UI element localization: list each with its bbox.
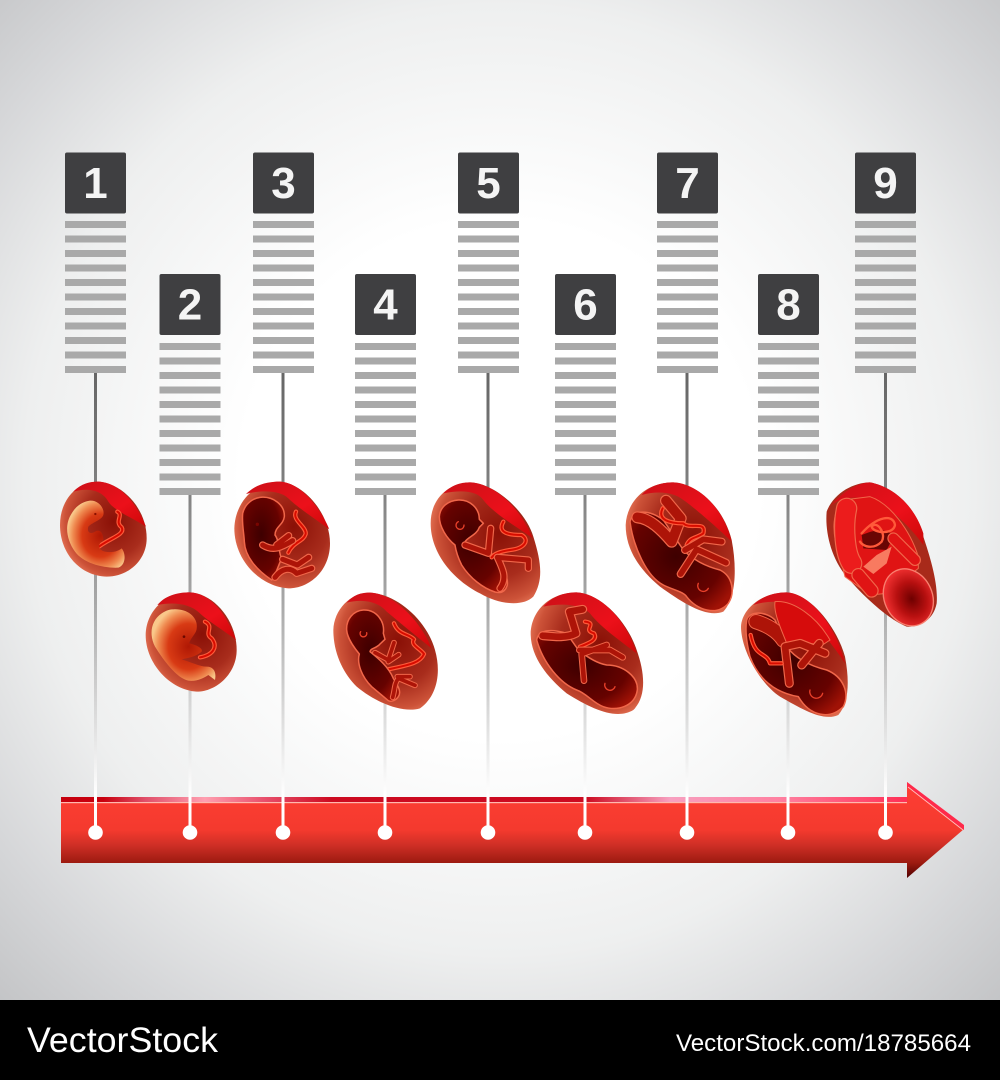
timeline arrow <box>61 782 964 878</box>
step 9 label: 9 <box>873 159 898 208</box>
step 5 label: 5 <box>476 159 501 208</box>
step 2 label <box>160 274 220 495</box>
fetus 9 <box>826 482 942 634</box>
step 4 label: 4 <box>373 280 398 330</box>
fetus 6 <box>531 592 643 714</box>
step 8 label <box>758 274 819 495</box>
connector line 4 <box>384 495 386 832</box>
fetus 8 <box>741 592 848 717</box>
step 7 label <box>657 152 718 373</box>
step 3 label <box>253 152 314 373</box>
connector line 2 <box>188 495 192 832</box>
fetus 1 <box>60 482 147 577</box>
fetus 7 <box>626 482 735 613</box>
timeline dots <box>88 825 893 840</box>
footer bar <box>0 1000 1000 1080</box>
connector line 8 <box>786 495 790 832</box>
connector line 6 <box>584 495 586 832</box>
fetus 5 <box>431 482 540 603</box>
connector line 1 <box>94 373 97 832</box>
step 6 label: 6 <box>573 280 598 330</box>
connector line 7 <box>686 373 688 832</box>
step 6 label <box>555 274 616 495</box>
step 3 label: 3 <box>271 159 296 208</box>
fetus 2 <box>146 592 237 692</box>
step 1 label <box>65 152 126 373</box>
step 7 label: 7 <box>675 159 700 208</box>
step 5 label <box>458 152 519 373</box>
fetus 3 <box>234 482 330 588</box>
fetus 4 <box>333 593 438 710</box>
footer url: VectorStock.com/18785664 <box>676 1030 971 1057</box>
connector line 5 <box>486 373 490 832</box>
step 8 label: 8 <box>776 280 801 330</box>
connector line 9 <box>884 373 887 832</box>
step 4 label <box>355 274 416 495</box>
step 9 label <box>855 152 916 373</box>
connector line 3 <box>282 373 284 832</box>
step 2 label: 2 <box>178 280 202 330</box>
footer logo: VectorStock <box>27 1021 219 1060</box>
step 1 label: 1 <box>83 159 108 208</box>
